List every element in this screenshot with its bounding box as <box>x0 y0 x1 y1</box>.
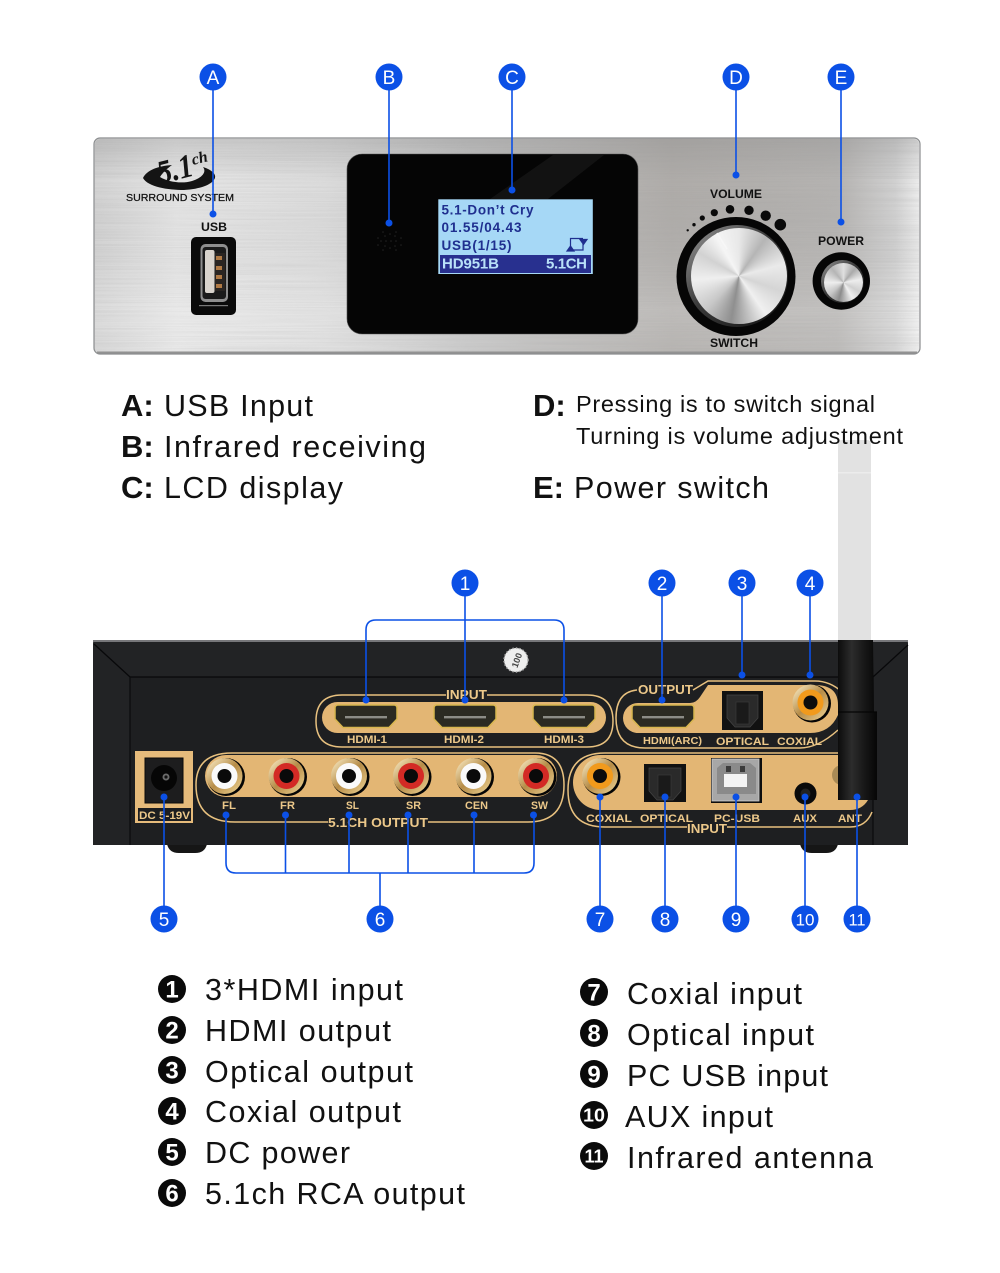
coaxial input jack: COXIAL <box>586 813 632 825</box>
legend item 8: 8 <box>587 1020 601 1048</box>
legend item 8: Optical input <box>627 1018 815 1052</box>
optical output port: OPTICAL <box>716 736 769 748</box>
volume knob <box>676 187 796 350</box>
text block: front panel legend left: Infrared receiving <box>164 430 426 464</box>
LCD screen: USB(1/15) <box>442 238 512 253</box>
text block: front panel legend right <box>533 388 903 505</box>
LCD screen <box>438 199 593 274</box>
text block: rear legend right <box>580 977 873 1175</box>
callout leaders and markers 1 to 4 <box>362 570 824 704</box>
marker A: A <box>207 68 220 89</box>
text block: front panel legend left: A: <box>121 388 154 423</box>
SR jack: SR <box>406 800 421 812</box>
output group <box>616 681 842 748</box>
panel: rear view of the unit <box>93 640 908 853</box>
LCD screen: 5.1CH <box>546 256 587 272</box>
ANT label <box>832 765 862 825</box>
legend item 2: HDMI output <box>205 1014 392 1048</box>
DC power socket <box>135 751 193 823</box>
legend item 9: PC USB input <box>627 1059 829 1093</box>
marker C: C <box>505 68 519 89</box>
logo: 5.1ch surround system: 5.1 <box>153 148 197 192</box>
legend item 9: 9 <box>587 1062 601 1088</box>
legend item 11: 11 <box>584 1146 604 1166</box>
legend item 10: 10 <box>583 1106 605 1126</box>
callout leaders and markers A to E <box>200 64 854 226</box>
SR jack <box>393 758 432 812</box>
coaxial output port <box>777 684 831 748</box>
legend item 5: 5 <box>165 1140 179 1166</box>
output group: OUTPUT <box>638 683 693 697</box>
marker 4: 4 <box>805 574 816 595</box>
SW jack <box>518 758 556 812</box>
rating sticker: 100 <box>510 652 524 669</box>
marker 7: 7 <box>595 910 605 931</box>
marker E: E <box>835 68 847 89</box>
legend item 11: Infrared antenna <box>627 1141 873 1175</box>
coaxial output port: COXIAL <box>777 736 822 748</box>
ANT label: ANT <box>838 813 862 825</box>
text block: front panel legend right: Power switch <box>574 471 769 505</box>
marker B: B <box>383 68 395 89</box>
DC power socket: DC 5-19V <box>139 810 191 822</box>
AUX jack: AUX <box>793 813 818 825</box>
LCD bezel <box>347 154 638 334</box>
PC USB port: PC-USB <box>714 813 760 825</box>
rating sticker <box>504 648 528 672</box>
CEN jack: CEN <box>465 800 488 812</box>
marker 5: 5 <box>159 910 169 931</box>
marker 2: 2 <box>657 574 667 595</box>
PC USB port <box>711 758 762 825</box>
SL jack: SL <box>346 800 359 812</box>
panel: front view of the unit <box>94 138 920 354</box>
marker C <box>498 64 526 194</box>
marker 1 with HDMI bracket: 1 <box>460 574 470 595</box>
USB port <box>191 220 236 315</box>
legend item 6: 5.1ch RCA output <box>205 1177 466 1211</box>
5.1CH RCA output group <box>196 753 564 830</box>
text block: front panel legend right: Pressing is to switch signal <box>576 391 875 417</box>
HDMI ARC port <box>632 705 702 747</box>
marker 6 with RCA bracket: 6 <box>375 910 385 931</box>
text block: front panel legend right: E: <box>533 470 564 505</box>
text block: front panel legend left: LCD display <box>164 471 344 505</box>
legend item 7: Coxial input <box>627 977 803 1011</box>
HDMI-2 port: HDMI-2 <box>444 734 484 746</box>
antenna: black base <box>838 640 877 800</box>
marker 1 with HDMI bracket <box>362 570 568 704</box>
repeat icon <box>567 238 587 251</box>
text block: front panel legend left: C: <box>121 470 154 505</box>
SL jack <box>331 758 370 812</box>
optical input port <box>640 764 693 825</box>
marker 9 <box>722 794 750 932</box>
power button <box>813 234 870 310</box>
marker 11 <box>844 794 870 932</box>
SW jack: SW <box>531 800 549 812</box>
AUX jack <box>793 782 818 825</box>
marker 7 <box>586 794 614 932</box>
marker 8 <box>652 794 678 932</box>
marker B <box>376 64 402 226</box>
logo: 5.1ch surround system <box>126 148 234 204</box>
optical input port: OPTICAL <box>640 813 693 825</box>
HDMI-3 port <box>533 705 595 746</box>
HDMI-3 port: HDMI-3 <box>544 734 584 746</box>
marker 9: 9 <box>731 910 741 931</box>
marker 10 <box>792 794 818 932</box>
marker 2 <box>648 570 676 704</box>
callout leaders and markers 5 to 11 <box>150 794 870 932</box>
marker D <box>722 64 750 178</box>
marker A <box>200 64 226 218</box>
optical output port <box>716 691 769 748</box>
HDMI input group <box>316 688 613 747</box>
HDMI-1 port: HDMI-1 <box>347 734 387 746</box>
logo: 5.1ch surround system: ch <box>190 148 210 169</box>
text block: front panel legend left: B: <box>121 429 154 464</box>
marker 3: 3 <box>737 574 747 595</box>
marker 4 <box>796 570 824 678</box>
legend item 4: Coxial output <box>205 1095 402 1129</box>
infrared receiver grille <box>377 231 402 251</box>
marker E <box>828 64 854 226</box>
marker 5 <box>150 794 178 932</box>
FL jack <box>206 758 245 812</box>
FL jack: FL <box>222 800 236 812</box>
text block: rear legend left <box>158 973 466 1211</box>
antenna: upper grey section <box>838 440 871 645</box>
legend item 10: AUX input <box>625 1100 774 1134</box>
legend item 1: 1 <box>165 976 179 1004</box>
volume knob: SWITCH <box>710 336 758 350</box>
input group: INPUT <box>687 822 727 836</box>
FR jack <box>268 758 307 812</box>
marker 6 with RCA bracket <box>222 812 537 932</box>
marker 3 <box>728 570 756 678</box>
volume knob: VOLUME <box>710 187 762 201</box>
marker D: D <box>729 68 743 89</box>
5.1CH RCA output group: 5.1CH OUTPUT <box>328 815 428 830</box>
HDMI ARC port: HDMI(ARC) <box>643 735 702 747</box>
LCD screen: 5.1-Don’t Cry <box>442 202 534 218</box>
coaxial input jack <box>582 758 632 825</box>
HDMI-1 port <box>335 705 397 746</box>
FR jack: FR <box>280 800 295 812</box>
marker 11: 11 <box>848 910 866 930</box>
USB port: USB <box>201 220 227 234</box>
input group <box>568 753 872 836</box>
legend item 3: 3 <box>165 1058 179 1084</box>
marker 10: 10 <box>796 910 814 930</box>
text block: front panel legend left: USB Input <box>164 389 314 423</box>
legend item 1: 3*HDMI input <box>205 973 404 1007</box>
LCD screen: HD951B <box>442 256 499 272</box>
LCD screen: 01.55/04.43 <box>442 220 522 235</box>
legend item 6: 6 <box>165 1180 179 1208</box>
legend item 3: Optical output <box>205 1055 414 1089</box>
marker 8: 8 <box>660 910 670 931</box>
legend item 7: 7 <box>587 980 601 1006</box>
CEN jack <box>456 758 494 812</box>
logo: 5.1ch surround system: SURROUND SYSTEM <box>126 192 234 204</box>
legend item 5: DC power <box>205 1136 350 1170</box>
legend item 4: 4 <box>165 1098 179 1126</box>
power button: POWER <box>818 234 864 248</box>
HDMI input group: INPUT <box>446 688 487 702</box>
text block: front panel legend right: D: <box>533 388 566 423</box>
text block: front panel legend left <box>121 388 426 505</box>
legend item 2: 2 <box>165 1018 179 1044</box>
text block: front panel legend right: Turning is volume adjustment <box>576 423 903 449</box>
HDMI-2 port <box>434 705 496 746</box>
